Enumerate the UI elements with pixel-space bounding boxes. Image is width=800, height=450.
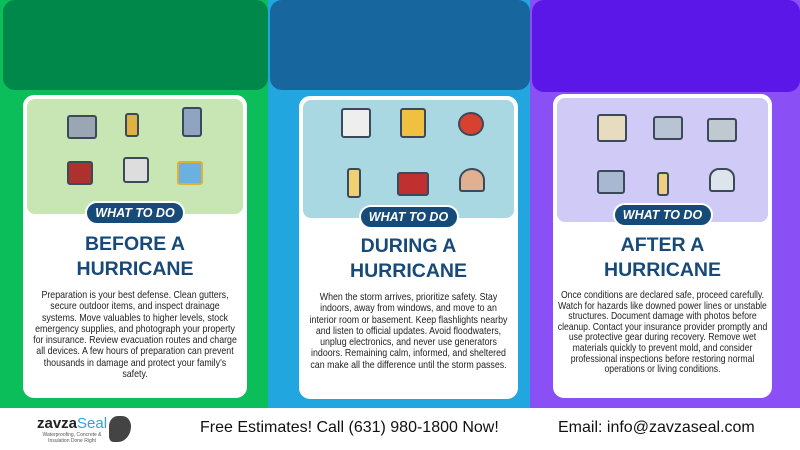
badge: what to do <box>612 203 712 227</box>
header band: after <box>532 0 800 92</box>
footer <box>0 408 800 450</box>
heading: during a hurricane <box>350 235 467 282</box>
text: after: use protective gear during recovery. Remove wet <box>569 332 756 343</box>
heading: before a hurricane: HURRICANE <box>76 258 194 280</box>
text: before: for insurance. Review evacuation routes and charge <box>33 335 237 346</box>
illustration: after <box>557 98 768 222</box>
heading: before a hurricane: BEFORE A <box>85 233 185 255</box>
text: after: professional inspections before restoring normal <box>571 354 754 365</box>
heading: after a hurricane: AFTER A <box>621 234 704 256</box>
header band: before <box>3 0 268 90</box>
logo: zavza seal: Waterproofing, Concrete & <box>42 432 102 438</box>
card: after <box>553 94 772 398</box>
card: during <box>299 96 518 399</box>
card: before <box>23 95 247 398</box>
panel: before <box>0 0 268 410</box>
heading: during a hurricane: DURING A <box>361 235 456 257</box>
illustration: before <box>27 99 243 214</box>
badge: what to do <box>358 205 458 229</box>
text: during: interior room or basement. Keep flashlights nearby <box>310 315 507 326</box>
text: during: indoors. Remaining calm, informed, and sheltered <box>311 348 506 359</box>
header band: during <box>270 0 530 90</box>
text: phone: Free Estimates! Call (631) 980-1800 Now! <box>200 419 499 436</box>
panel: after <box>530 0 800 410</box>
text: before: emergency supplies, and photograph your property <box>35 324 235 335</box>
text: after: cleanup. Contact your insurance provider promptly and <box>558 322 767 333</box>
text: before: all devices. A few hours of preparation can prevent <box>36 346 234 357</box>
badge: what to do <box>85 201 185 225</box>
text: before: thousands in damage and protect your family's <box>44 358 226 369</box>
text: during <box>310 292 508 371</box>
text: before: safety. <box>122 369 148 380</box>
illustration: during <box>303 100 514 218</box>
text: during: indoors, away from windows, and move to an <box>320 303 497 314</box>
heading: during a hurricane: HURRICANE <box>350 260 467 282</box>
badge: what to do: WHAT TO DO <box>623 208 702 222</box>
heading: after a hurricane <box>604 234 721 281</box>
badge: what to do: WHAT TO DO <box>95 206 175 220</box>
panel: during <box>268 0 530 410</box>
text: during: When the storm arrives, prioritize safety. Stay <box>320 292 497 303</box>
text: before: systems. Move valuables to higher levels, stock <box>42 313 228 324</box>
text: during: and listen to official updates. Avoid floodwaters, <box>316 326 501 337</box>
heading: after a hurricane: HURRICANE <box>604 259 721 281</box>
text: before: Preparation is your best defense. Clean gutters, <box>41 290 229 301</box>
heading: before a hurricane <box>76 233 194 280</box>
text: after <box>558 290 767 375</box>
text: email: Email: info@zavzaseal.com <box>558 419 755 436</box>
logo: zavza seal <box>37 415 131 444</box>
text: before <box>33 290 237 380</box>
logo: zavza seal: Insulation Done Right <box>48 438 96 444</box>
badge: what to do: WHAT TO DO <box>369 210 448 224</box>
text: after: materials quickly to prevent mold, and consider <box>573 343 752 354</box>
logo: zavza seal: zavzaSeal <box>37 415 107 432</box>
text: after: Watch for hazards like downed power lines or unstable <box>558 301 767 312</box>
text: after: Once conditions are declared safe, proceed carefully. <box>561 290 764 301</box>
text: after: operations or living conditions. <box>604 364 721 375</box>
text: during: can make all the difference until the storm passes. <box>310 360 507 371</box>
text: during: unplug electronics, and never use generators <box>320 337 497 348</box>
text: before: secure outdoor items, and inspect drainage <box>50 301 220 312</box>
text: after: structures. Document damage with photos before <box>568 311 757 322</box>
